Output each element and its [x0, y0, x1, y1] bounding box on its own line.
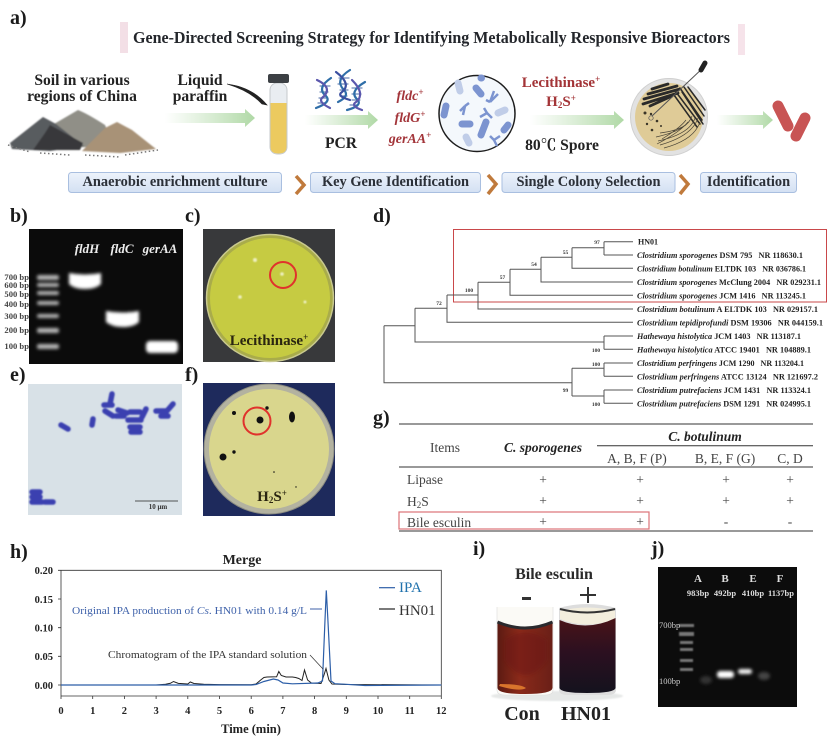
screening criteria: +	[571, 93, 576, 103]
bootstrap values: 100	[592, 348, 600, 354]
x axis values: 3	[153, 706, 159, 717]
bootstrap values: 100	[465, 288, 473, 294]
soil label: Soil in various	[34, 72, 130, 89]
screening criteria: H	[546, 93, 576, 110]
table rows: +	[722, 493, 730, 508]
label d: d)	[373, 205, 391, 227]
panel: a) screening workflow	[8, 7, 805, 194]
table rows: +	[722, 472, 730, 487]
panel: e) microscopy	[10, 364, 182, 515]
x axis values: 8	[312, 706, 317, 717]
icon: streak plate	[630, 63, 708, 156]
label j: j)	[650, 538, 664, 560]
table rows: +	[539, 472, 547, 487]
step: identification: Identification	[707, 174, 790, 190]
size markers: 400 bp	[4, 299, 29, 309]
plate background	[203, 383, 335, 516]
label a: a)	[10, 7, 27, 29]
gene names: +	[420, 109, 425, 119]
bootstrap values: 97	[594, 240, 600, 246]
size markers: 500 bp	[4, 289, 29, 299]
screening criteria: S	[562, 94, 571, 110]
ladder	[679, 624, 694, 671]
chevron	[488, 175, 496, 194]
annotation: chromatogram of standard: Chromatogram of the IPA standard solution	[108, 650, 308, 661]
table headers: C. botulinum	[668, 429, 742, 444]
table headers: C. sporogenes	[504, 440, 582, 455]
x axis values: 2	[122, 706, 127, 717]
shadow	[491, 691, 623, 701]
table rows: -	[724, 514, 729, 529]
y axis values: 0.00	[35, 681, 53, 692]
table rows: H	[407, 494, 417, 509]
plate label: Lecithinase	[230, 333, 303, 349]
panel: b) gel	[4, 205, 183, 364]
table rows: S	[421, 494, 429, 509]
lane labels: A	[694, 573, 702, 585]
y axis values: 0.20	[35, 566, 53, 577]
panel: d) phylogenetic tree	[373, 205, 826, 408]
gel image	[29, 229, 183, 364]
gene names: gerAA	[388, 130, 431, 147]
micrograph background	[28, 384, 182, 515]
plate background	[203, 229, 335, 362]
table rows	[407, 472, 794, 530]
vial labels: HN01	[561, 703, 611, 725]
minus sign	[522, 597, 531, 600]
size markers: 200 bp	[4, 325, 29, 335]
arrow: identification	[717, 111, 773, 129]
IPA trace	[61, 590, 441, 686]
arrow: soil to tube	[165, 109, 255, 127]
spore label: 80℃ Spore	[525, 137, 599, 154]
label e: e)	[10, 364, 26, 386]
title: Gene-Directed Screening Strategy for Identifying Metabolically Responsive Bioreactors	[133, 28, 731, 47]
gel bands	[69, 273, 178, 353]
taxon labels: Hathewaya histolytica JCM 1403 NR 113187.1	[636, 332, 801, 341]
agar plate with colonies	[204, 384, 334, 514]
table headers: C, D	[777, 451, 803, 466]
control vial	[497, 607, 553, 695]
label b: b)	[10, 205, 28, 227]
gel ladder	[37, 275, 59, 349]
step: anaerobic enrichment culture	[68, 172, 282, 192]
lane labels: E	[749, 573, 757, 585]
title	[120, 22, 745, 55]
HN01 vial	[559, 604, 616, 695]
panel: j) PCR gel	[650, 538, 797, 707]
x axis values: 0	[58, 706, 64, 717]
x axis values: 6	[249, 706, 254, 717]
taxon labels: Clostridium perfringens ATCC 13124 NR 121697.2	[637, 372, 818, 381]
table headers	[430, 429, 803, 466]
table rows: +	[636, 514, 644, 529]
size markers: 100 bp	[4, 341, 29, 351]
gel lane labels: fldH	[75, 241, 100, 256]
bootstrap values: 57	[500, 275, 506, 281]
bootstrap values: 100	[592, 402, 600, 408]
agar plate	[206, 234, 334, 362]
y axis values: 0.10	[35, 624, 53, 634]
gene names: +	[418, 87, 423, 97]
plus sign	[580, 587, 596, 603]
icon: culture tube	[268, 74, 289, 154]
size markers: 700 bp	[4, 272, 29, 282]
gene names: fldc	[397, 87, 423, 104]
plate label: +	[303, 332, 308, 342]
screening criteria: Lecithinase	[522, 74, 600, 91]
panel: f) H2S plate	[185, 364, 335, 516]
bootstrap values: 72	[436, 301, 442, 307]
bootstrap values: 99	[563, 388, 568, 394]
plate label: 2	[269, 495, 274, 505]
gene names: +	[426, 130, 431, 140]
size markers: 300 bp	[4, 311, 29, 321]
x axis title: Time (min)	[221, 722, 281, 736]
taxon labels: Clostridium botulinum ELTDK 103 NR 036786.1	[637, 264, 806, 273]
chevron	[296, 176, 304, 194]
scale bar	[135, 501, 178, 511]
bootstrap values: 100	[592, 362, 600, 368]
screening criteria: 2	[558, 100, 563, 110]
red highlight box	[399, 512, 649, 529]
table headers: B, E, F (G)	[695, 451, 755, 466]
x axis values: 4	[185, 706, 191, 717]
PCR label: PCR	[325, 135, 358, 152]
table headers: A, B, F (P)	[607, 451, 667, 466]
step: identification	[700, 172, 796, 192]
plate label: +	[282, 488, 287, 498]
x axis values: 5	[217, 706, 222, 717]
table rows: +	[539, 514, 547, 529]
red circle highlight	[244, 408, 270, 434]
label h: h)	[10, 541, 28, 563]
arrow: spore	[530, 111, 624, 129]
plate label: S	[273, 489, 282, 505]
label f: f)	[185, 364, 198, 386]
y axis values: 0.05	[35, 652, 53, 663]
taxon labels	[636, 238, 823, 408]
taxon labels: Clostridium putrefaciens JCM 1431 NR 113324.1	[637, 386, 811, 395]
paraffin label: paraffin	[173, 88, 228, 105]
taxon labels: Clostridium putrefaciens DSM 1291 NR 024995.1	[637, 399, 811, 408]
marker labels: 100bp	[659, 676, 680, 686]
x axis values: 9	[344, 706, 349, 717]
taxon labels: Clostridium botulinum A ELTDK 103 NR 029157.1	[637, 305, 818, 314]
table rows: 2	[417, 500, 421, 510]
table rows: +	[539, 493, 547, 508]
taxon labels: Clostridium sporogenes JCM 1416 NR 113245.1	[637, 291, 806, 300]
y axis values: 0.15	[35, 595, 53, 606]
taxon labels: Clostridium tepidiprofundi DSM 19306 NR 044159.1	[637, 318, 823, 327]
table rows: +	[636, 472, 644, 487]
vial labels: Con	[504, 703, 540, 725]
icon: bacteria circle	[439, 76, 515, 152]
arrow: PCR	[305, 111, 378, 129]
screening criteria: +	[595, 74, 600, 84]
gel lane labels: fldC	[110, 241, 134, 256]
marker labels: 700bp	[659, 620, 680, 630]
amplicon sizes: 410bp	[742, 588, 764, 598]
lane labels: F	[777, 573, 784, 585]
legend: IPA	[399, 580, 422, 596]
chart frame and ticks	[58, 570, 441, 699]
table rules	[399, 424, 813, 531]
legend: HN01	[399, 603, 436, 619]
x axis values: 12	[436, 706, 447, 717]
gel lane labels: gerAA	[142, 241, 178, 256]
x axis values: 11	[405, 706, 415, 717]
gene names: fldG	[395, 109, 425, 126]
panel: g) biochemical table	[373, 407, 813, 531]
bootstrap values: 55	[563, 250, 568, 256]
bands	[700, 669, 770, 684]
annotation: original IPA production: Original IPA production of Cs. HN01 with 0.14 g/L	[72, 606, 307, 617]
taxon labels: Clostridium sporogenes McClung 2004 NR 029231.1	[637, 278, 821, 287]
x axis values: 1	[90, 706, 95, 717]
icon: soil piles	[8, 110, 158, 157]
panel heading: Bile esculin	[515, 566, 593, 583]
x axis values: 7	[280, 706, 286, 717]
step: key gene identification: Key Gene Identification	[322, 174, 469, 190]
size markers: 600 bp	[4, 280, 29, 290]
panel: i) bile esculin vials	[473, 538, 623, 725]
taxon labels: Hathewaya histolytica ATCC 19401 NR 104889.1	[636, 345, 811, 354]
chevron	[680, 175, 688, 194]
bootstrap values: 54	[531, 262, 537, 268]
table rows: Bile esculin	[407, 515, 471, 530]
red circle highlight	[270, 262, 296, 288]
table headers: Items	[430, 440, 460, 455]
chart title: Merge	[223, 553, 261, 568]
icon: red rods	[778, 106, 805, 136]
step: key gene identification	[310, 172, 480, 192]
amplicon sizes: 1137bp	[768, 588, 794, 598]
step: anaerobic enrichment culture: Anaerobic enrichment culture	[83, 174, 268, 190]
stained rods	[32, 394, 173, 502]
label i: i)	[473, 538, 485, 560]
soil label: regions of China	[27, 88, 137, 105]
lane labels: B	[721, 573, 729, 585]
annotation: chromatogram of standard	[108, 650, 323, 669]
panel: c) lecithinase plate	[185, 205, 335, 362]
table rows: Lipase	[407, 472, 443, 487]
legend	[379, 580, 436, 619]
label g: g)	[373, 407, 390, 429]
step: single colony selection	[502, 172, 675, 192]
tree branches	[384, 242, 633, 403]
gel background	[658, 567, 797, 707]
table rows: +	[636, 493, 644, 508]
table rows: +	[786, 472, 794, 487]
step: single colony selection: Single Colony Selection	[517, 174, 660, 190]
taxon labels: Clostridium perfringens JCM 1290 NR 113204.1	[637, 359, 804, 368]
x axis values: 10	[373, 706, 383, 717]
amplicon sizes: 492bp	[714, 588, 736, 598]
taxon labels: HN01	[638, 238, 658, 246]
taxon labels: Clostridium sporogenes DSM 795 NR 118630.1	[637, 251, 803, 260]
panel: h) chromatogram	[10, 541, 447, 736]
scale bar: 10 μm	[149, 503, 167, 511]
red highlight box	[454, 230, 826, 302]
table rows: -	[788, 514, 793, 529]
table rows: +	[786, 493, 794, 508]
plate label: H	[257, 489, 269, 505]
label c: c)	[185, 205, 201, 227]
icon: DNA helices	[316, 70, 365, 110]
paraffin label: Liquid	[177, 72, 223, 89]
HN01 trace	[61, 668, 441, 685]
amplicon sizes: 983bp	[687, 588, 709, 598]
arrow: paraffin	[227, 84, 267, 105]
